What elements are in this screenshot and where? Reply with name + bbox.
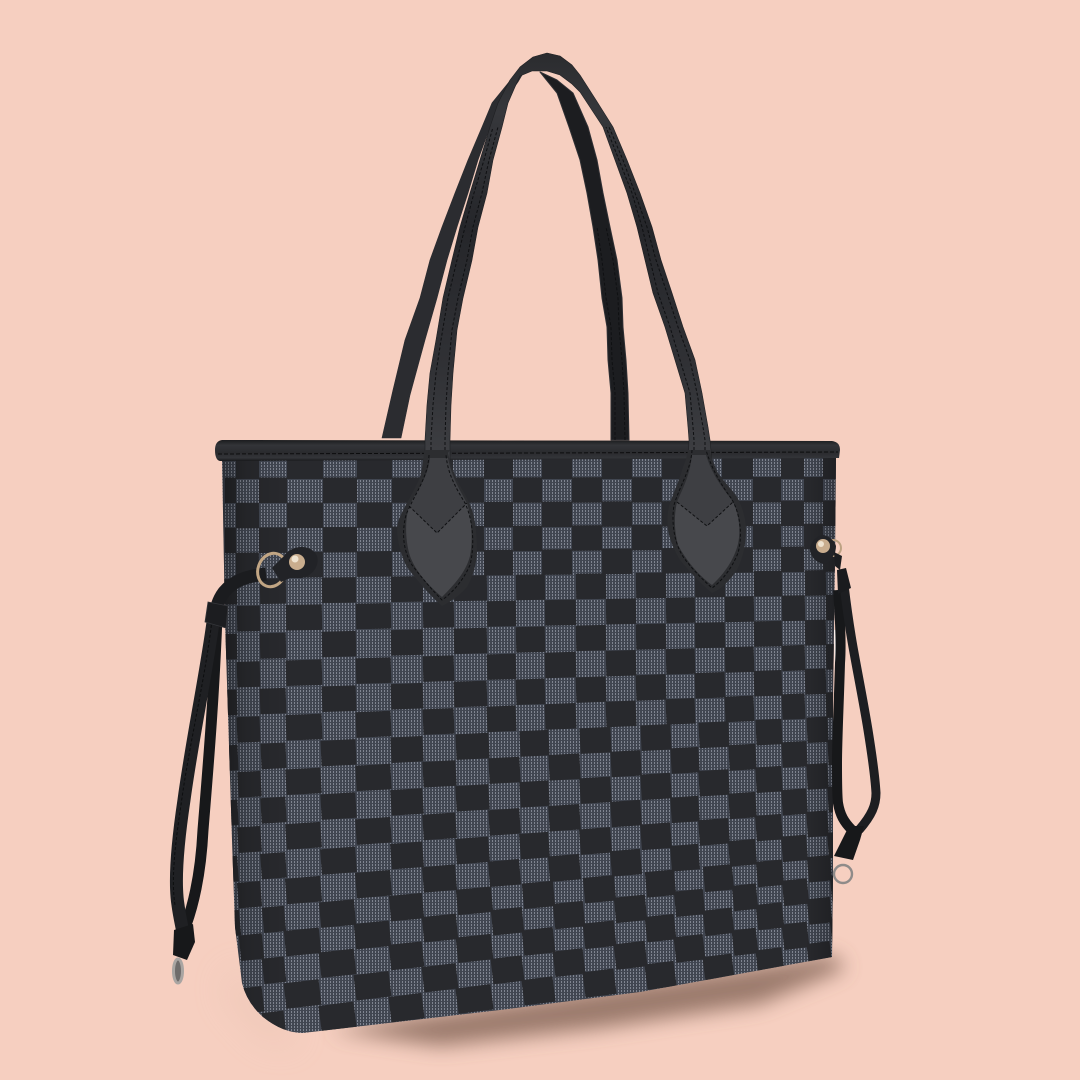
hand strap: front arc bbox=[425, 53, 712, 462]
floor shadow bbox=[225, 955, 846, 1046]
bag body with woven checker pattern bbox=[222, 458, 836, 1033]
cord keeper loop bbox=[205, 602, 228, 628]
patch lower leather bbox=[406, 503, 472, 597]
silver ring bbox=[174, 959, 182, 983]
right hardware: rivet tab bbox=[810, 535, 842, 570]
cord keeper bbox=[837, 568, 851, 594]
right drawstring cord bbox=[834, 568, 876, 883]
product illustration: checkered tote bag on peach background bbox=[170, 52, 880, 1058]
top leather trim bbox=[215, 440, 840, 461]
patch upper leather bbox=[677, 455, 733, 526]
left hardware: D-ring and rivet tab bbox=[253, 547, 318, 591]
left drawstring cord bbox=[173, 574, 266, 983]
right handle patch bbox=[667, 450, 746, 593]
side fold shading bbox=[222, 440, 836, 1050]
patch lower leather bbox=[675, 502, 739, 585]
back strap: left bbox=[382, 70, 525, 438]
dark checker rows bbox=[200, 465, 860, 1034]
cord upper tab bbox=[215, 574, 266, 618]
white sliver behind cord bbox=[835, 630, 836, 700]
cord clasp bbox=[173, 924, 195, 960]
silver ring bbox=[834, 865, 852, 883]
cord clasp bbox=[834, 826, 864, 860]
patch upper leather bbox=[409, 458, 467, 533]
back strap: right bbox=[540, 72, 629, 440]
left handle patch bbox=[397, 450, 477, 606]
woven grey base bbox=[222, 458, 836, 1033]
